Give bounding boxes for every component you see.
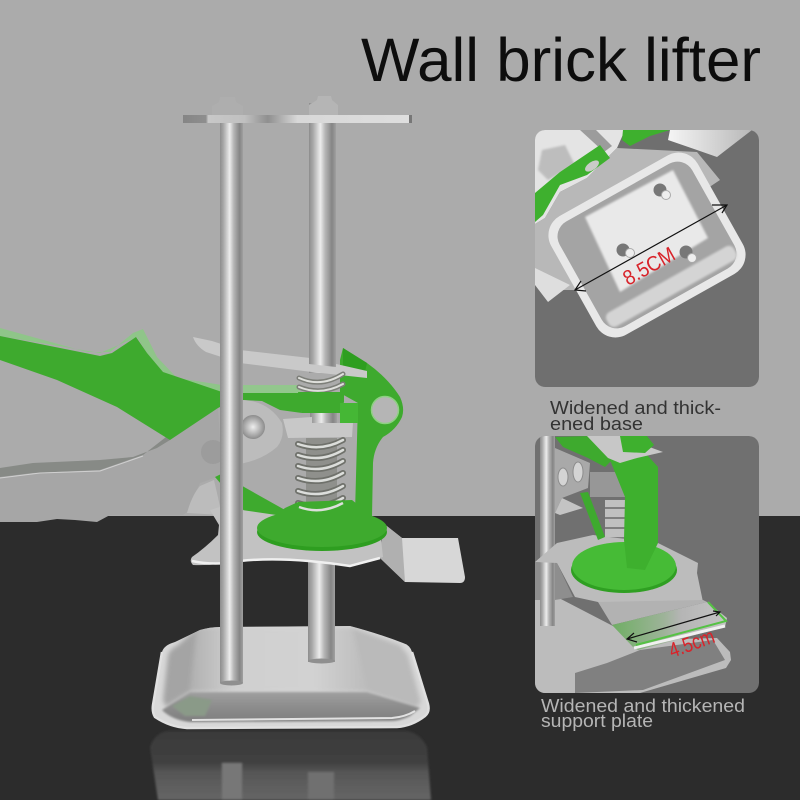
flat tab [612, 602, 727, 650]
green lower bar [215, 474, 285, 527]
soft pocket [538, 145, 575, 180]
title: Wall brick lifter [361, 26, 761, 94]
tab white edge [634, 626, 725, 648]
product: wall brick lifter tool [0, 96, 465, 800]
caption: base [550, 398, 721, 434]
white tab bottom left [535, 268, 570, 302]
caption: base: ened base [550, 414, 643, 434]
tab green edge [636, 602, 726, 645]
pivot rivet [241, 415, 265, 439]
green disc [571, 542, 677, 593]
arrow: 8.5CM dimension [575, 205, 727, 291]
lower lip [604, 244, 739, 329]
clamp plate [535, 535, 703, 602]
silver plate with rivets [555, 448, 590, 513]
base surfaces, softened [163, 627, 421, 708]
silver support behind [187, 480, 222, 515]
silver clamp plate [191, 507, 383, 567]
outer rim [548, 152, 746, 338]
lower silver plate [555, 498, 583, 515]
right slope [352, 627, 421, 708]
spring bottom ring [299, 503, 343, 510]
right rod, upper part [309, 103, 336, 373]
flat top [190, 627, 367, 692]
green strip to collar [243, 393, 302, 413]
foot tab fold [380, 523, 405, 582]
silver lower handle [0, 408, 222, 522]
base plate recess [575, 640, 725, 693]
dimension label: 8.5CM [619, 243, 679, 290]
green pillar [610, 447, 658, 570]
foot tab [380, 523, 465, 583]
round silver pivot plate [240, 400, 283, 464]
left slope [163, 628, 197, 707]
green tab [343, 348, 367, 372]
dark shaft block [590, 472, 625, 497]
green lever inner highlight [585, 160, 599, 172]
handle highlight line [0, 456, 143, 478]
green collar [298, 392, 344, 413]
arrow: 4.5cm dimension [627, 611, 720, 642]
left rod end cap [220, 680, 243, 686]
green handle pale edge [0, 328, 222, 394]
green disc [257, 500, 387, 551]
clamp plate front edge [192, 558, 380, 566]
square base plate [153, 626, 429, 728]
white upper left body [535, 130, 625, 224]
background: dark floor [0, 516, 800, 800]
dimension label: 4.5cm [666, 625, 718, 663]
raised centre [585, 170, 708, 292]
left rod [220, 110, 243, 683]
panel background [535, 130, 759, 387]
top silver bracket [587, 436, 663, 463]
rivets [558, 462, 583, 486]
base tray [548, 152, 746, 338]
caption: support plate [541, 696, 745, 731]
upper green arm [555, 436, 612, 467]
head eyelet hole [372, 396, 398, 424]
silver base plate [535, 597, 731, 693]
outer rim [153, 652, 429, 728]
right rod, lower part [308, 560, 335, 662]
green inner tab [340, 403, 358, 423]
green lever top [622, 130, 670, 146]
rod collar above bracket [309, 340, 336, 367]
lower spring [298, 438, 343, 516]
front slope [162, 692, 420, 722]
steel shaft section [310, 413, 337, 431]
caption: support plate: support plate [541, 711, 653, 731]
rod [540, 436, 555, 626]
panel: support plate detail [535, 436, 759, 693]
base reflection [150, 731, 431, 800]
caption: base: Widened and thick- [550, 398, 721, 418]
top nut, left [212, 97, 243, 115]
mid bracket [283, 417, 353, 438]
upper spring [299, 374, 343, 391]
rear rivet [201, 440, 225, 464]
greenish reflection [172, 696, 212, 716]
caption: support plate: Widened and thickened [541, 696, 745, 716]
green head of lever [340, 348, 403, 525]
top plate [183, 115, 412, 123]
top nut, right [309, 96, 338, 115]
front highlight [192, 711, 415, 720]
silver arm, right [668, 130, 752, 157]
green handle [0, 336, 222, 440]
rods in upper left [580, 130, 612, 152]
green strip to collar pale [243, 385, 300, 393]
fold of tab [598, 600, 707, 625]
green top tab [620, 436, 654, 453]
green left arm [580, 492, 605, 540]
right rod end cap [308, 658, 335, 664]
background: grey wall [0, 0, 800, 516]
arch shadow under clamp [535, 562, 573, 600]
top plate end [409, 115, 412, 123]
spring [605, 500, 625, 538]
green lever part [535, 145, 610, 222]
panel background [535, 436, 759, 693]
panel: base detail [535, 130, 759, 387]
bolts [616, 184, 696, 262]
angled top bracket [193, 337, 367, 378]
handle shadow band [0, 437, 170, 477]
grey bracket behind tray [535, 148, 720, 290]
tray recess [558, 162, 736, 328]
